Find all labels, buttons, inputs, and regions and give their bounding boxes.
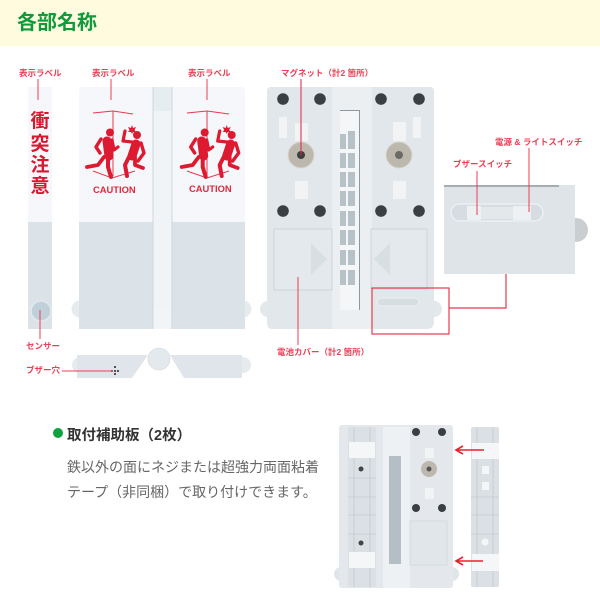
callout: detail box connector: [372, 274, 506, 334]
panel: front view: [72, 87, 252, 329]
hinge: [153, 87, 172, 329]
icon: buzzer holes: [111, 366, 119, 375]
label: front display right: 表示ラベル: [188, 68, 231, 78]
body text: [67, 459, 319, 500]
panel: top view: [72, 348, 251, 378]
label: sensor: [26, 310, 60, 351]
label: buzzer switch: ブザースイッチ: [453, 159, 512, 169]
battery covers: [274, 229, 427, 290]
label: battery cover: 電池カバー（計2 箇所）: [277, 347, 369, 357]
label: buzzer switch: [453, 159, 512, 215]
label: power and light switch: [495, 137, 582, 212]
label: battery cover: [277, 277, 369, 357]
label: side display: 表示ラベル: [19, 68, 62, 78]
warning text: vertical: [30, 110, 50, 197]
label: power and light switch: 電源 & ライトスイッチ: [495, 137, 582, 147]
label: side display: [19, 68, 62, 100]
header band: [0, 0, 600, 46]
warning text: vertical: 意: [30, 175, 50, 197]
warning text: vertical: 衝: [30, 110, 50, 132]
icon: caution left: [87, 111, 144, 178]
slots: [279, 117, 421, 199]
vent grid: [340, 131, 355, 285]
arrow: upper: [456, 446, 484, 454]
arrow: lower: [456, 557, 483, 565]
left mounting plate: [348, 427, 376, 587]
panel: switch detail: [444, 185, 588, 274]
label: buzzer hole: [26, 365, 113, 375]
label: front display left: [92, 68, 135, 100]
label: magnet: マグネット（計2 箇所）: [281, 68, 373, 78]
label: front display right: [188, 68, 231, 100]
icon: magnets: [288, 142, 412, 168]
label: magnet: [281, 68, 373, 155]
panel: back view: [260, 87, 442, 329]
panel: separate mounting plate: [471, 427, 499, 587]
switch slot: [377, 298, 419, 306]
warning text: vertical: 突: [30, 133, 50, 155]
body text: テープ（非同梱）で取り付けできます。: [67, 484, 317, 500]
icon: caution right: [182, 111, 239, 178]
panel: front view: CAUTION: [93, 184, 136, 195]
panel: side view: [28, 87, 52, 329]
warning text: vertical: 注: [30, 154, 50, 176]
mount holes: [277, 93, 425, 217]
panel: mounting plate assembly: [334, 425, 459, 588]
title: 各部名称: [17, 10, 97, 34]
label: buzzer hole: ブザー穴: [26, 365, 61, 375]
panel: front view: CAUTION: [189, 183, 232, 194]
label: front display left: 表示ラベル: [92, 68, 135, 78]
label: sensor: センサー: [26, 341, 60, 351]
icon: sensor: [31, 301, 51, 321]
bullet heading: 取付補助板（2枚）: [67, 426, 191, 444]
body text: 鉄以外の面にネジまたは超強力両面粘着: [67, 459, 319, 475]
